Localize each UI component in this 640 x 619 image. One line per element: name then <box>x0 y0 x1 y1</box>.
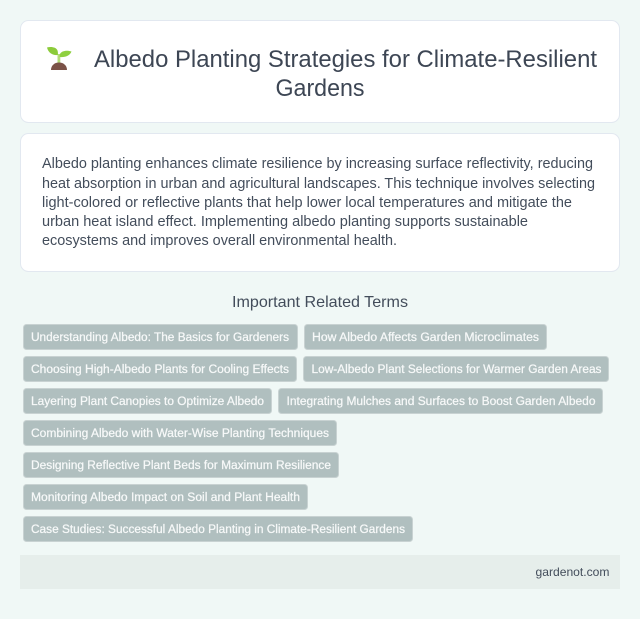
text block: description: urban heat island effect. Implementing albedo planting supports sustainable <box>42 214 528 230</box>
tag: understanding albedo: Understanding Albedo: The Basics for Gardeners <box>31 330 289 344</box>
panel: description <box>20 134 620 272</box>
tag: water-wise <box>24 420 336 446</box>
text block: description: light-colored or reflective plants that help lower local temperatures and mitigate the <box>42 195 572 211</box>
tag list <box>24 324 608 542</box>
footer: gardenot.com <box>536 565 610 579</box>
tag: monitoring <box>24 484 308 510</box>
title: Gardens <box>276 75 364 102</box>
tag: water-wise: Combining Albedo with Water-Wise Planting Techniques <box>31 426 329 440</box>
title: Albedo Planting Strategies for Climate-Resilient <box>94 46 597 73</box>
tag: mulches and surfaces: Integrating Mulches and Surfaces to Boost Garden Albedo <box>286 394 596 408</box>
tag: case studies <box>24 516 412 542</box>
text block: description: heat absorption in urban and agricultural landscapes. This technique involves selecting <box>42 176 595 192</box>
panel: title card <box>20 20 620 122</box>
tag: microclimates <box>304 324 546 350</box>
tag: plant canopies <box>24 388 272 414</box>
title <box>94 46 597 102</box>
tag: understanding albedo <box>24 324 298 350</box>
tag: plant canopies: Layering Plant Canopies to Optimize Albedo <box>31 394 264 408</box>
tag: low-albedo plants: Low-Albedo Plant Selections for Warmer Garden Areas <box>312 362 602 376</box>
tag: reflective beds: Designing Reflective Plant Beds for Maximum Resilience <box>31 458 331 472</box>
tag: reflective beds <box>24 452 338 478</box>
icon: seedling <box>47 47 72 70</box>
tag: high-albedo plants: Choosing High-Albedo Plants for Cooling Effects <box>31 362 289 376</box>
footer <box>20 555 620 589</box>
tag: monitoring: Monitoring Albedo Impact on Soil and Plant Health <box>31 490 300 504</box>
text block: description <box>42 156 595 249</box>
tag: microclimates: How Albedo Affects Garden Microclimates <box>312 330 539 344</box>
text block: description: Albedo planting enhances climate resilience by increasing surface reflectivity, reducing <box>42 156 593 172</box>
tag: case studies: Case Studies: Successful Albedo Planting in Climate-Resilient Gardens <box>31 522 405 536</box>
tag: low-albedo plants <box>304 356 608 382</box>
tag: high-albedo plants <box>24 356 296 382</box>
tag: mulches and surfaces <box>278 388 602 414</box>
text block: description: ecosystems and improves overall environmental health. <box>42 233 397 249</box>
heading: related terms: Important Related Terms <box>232 294 408 311</box>
